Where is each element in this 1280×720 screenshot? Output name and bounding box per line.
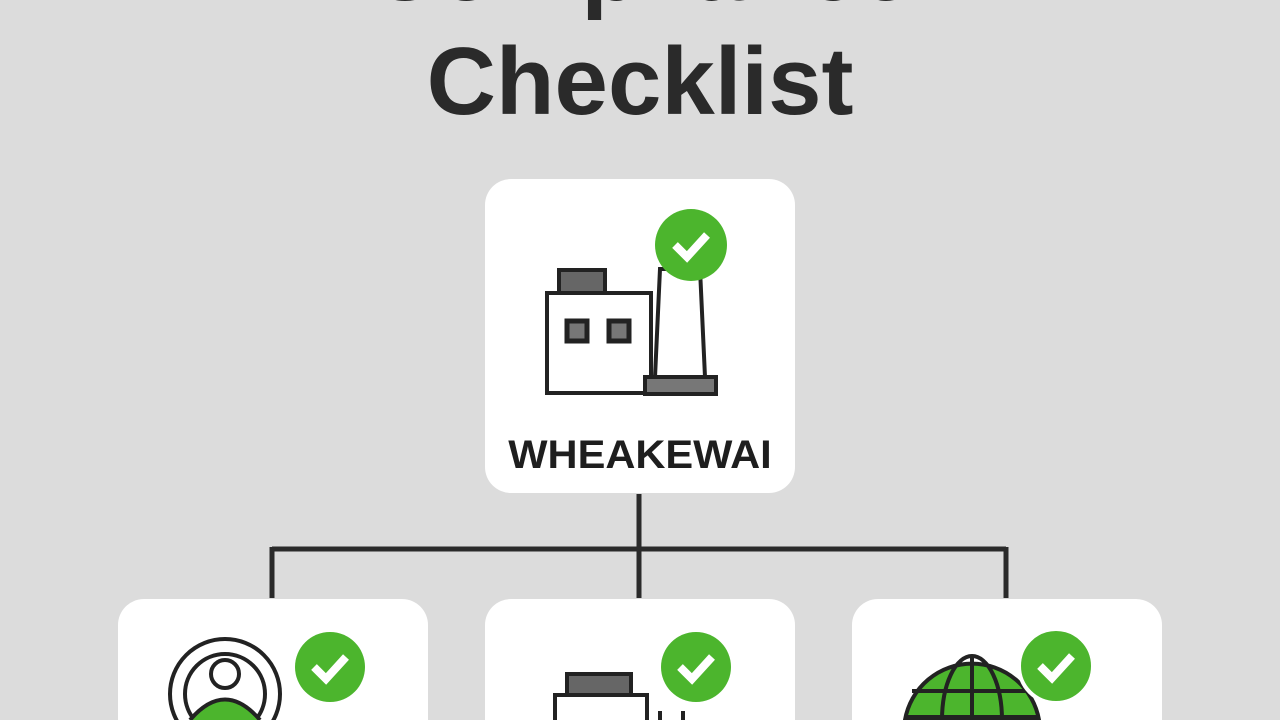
label: WHEAKEWAI	[508, 433, 772, 477]
title: Checklist	[427, 28, 853, 135]
top card	[485, 179, 795, 493]
card: left	[118, 599, 428, 720]
icon: check badge	[295, 632, 365, 702]
icon: factory small	[555, 674, 683, 720]
title	[368, 0, 912, 135]
icon: factory	[545, 209, 727, 396]
icon: person target	[170, 639, 280, 720]
icon: globe	[905, 656, 1039, 720]
icon: check badge	[655, 209, 727, 281]
card: middle	[485, 599, 795, 720]
card: right	[852, 599, 1162, 720]
icon: check badge	[661, 632, 731, 702]
icon: check badge	[1019, 629, 1093, 703]
